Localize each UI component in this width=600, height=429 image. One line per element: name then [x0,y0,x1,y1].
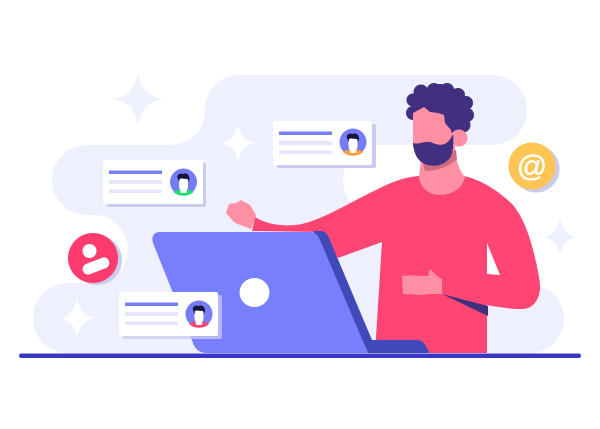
star: top left [113,72,163,127]
star: white centre [221,124,255,162]
card shadow [277,124,376,168]
icon: at sign badge: @ [517,150,547,183]
card text lines [109,170,162,193]
card text lines [125,302,178,325]
star: right [544,218,576,256]
right hand [402,269,442,295]
ground line [19,354,581,358]
arm shadow [442,294,488,316]
torso and arms [252,176,540,353]
hair [406,83,474,134]
face [413,107,454,153]
background blob [33,75,564,353]
card body [119,292,218,336]
profile card: bottom left [119,292,222,339]
person [226,83,540,353]
card body [103,160,203,204]
left hand [226,200,256,229]
icon: at sign badge [508,142,560,192]
neck shadow [423,150,457,171]
neck [419,145,465,195]
profile card: left [103,160,206,207]
laptop base and hinge [313,231,429,353]
laptop lid [152,232,368,353]
star: white lower left [60,298,95,338]
avatar [186,300,212,328]
card shadow [123,295,222,339]
laptop logo [240,278,270,307]
gap between arm and body [487,243,500,275]
card body [273,121,372,165]
laptop [152,231,429,353]
icon: user badge [68,233,122,285]
card text lines [279,132,332,154]
avatar [340,128,366,156]
beard [413,134,453,166]
ear [450,130,468,146]
avatar [170,168,197,196]
card shadow [107,163,206,207]
profile card: top right [273,121,376,168]
